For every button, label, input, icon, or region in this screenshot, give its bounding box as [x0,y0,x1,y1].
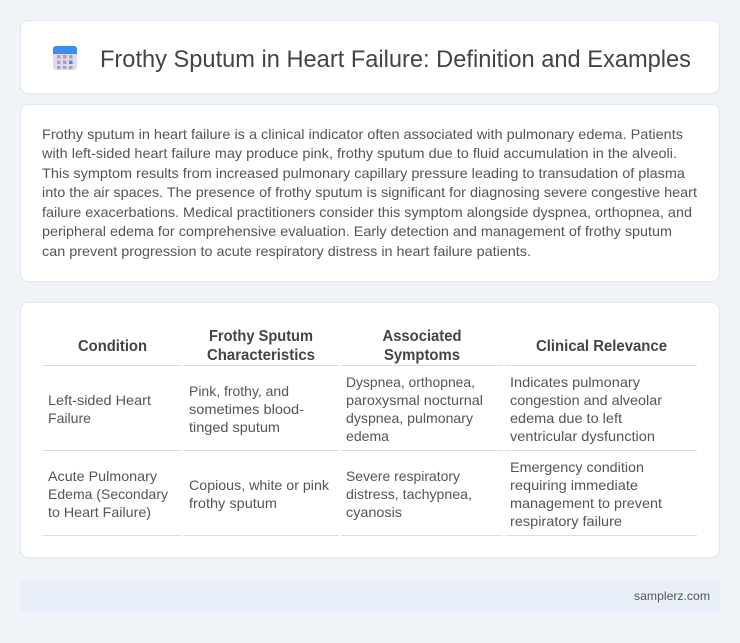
footer [20,579,720,613]
table row: left-sided heart failure: dyspnea, pulmonary [346,410,473,426]
table row: left-sided heart failure: Dyspnea, orthopnea, [346,374,475,390]
icon: calendar [53,46,77,70]
table row: left-sided heart failure: Left-sided Heart [48,392,151,408]
table row: left-sided heart failure: ventricular dysfunction [510,428,655,444]
table row: acute pulmonary edema: respiratory failure [510,513,622,529]
table row: left-sided heart failure: edema [346,428,389,444]
text block: description: can prevent progression to acute respiratory distress in heart failure patients. [42,243,531,259]
title: Frothy Sputum in Heart Failure: Definition and Examples [100,46,691,73]
table row: acute pulmonary edema: requiring immediate [510,477,638,493]
table row: acute pulmonary edema: Copious, white or pink [189,477,330,493]
table row: acute pulmonary edema: Severe respiratory [346,468,460,484]
footer source text: samplerz.com [634,589,710,603]
text block: description: This symptom results from increased pulmonary capillary pressure leading to transudation of plasma [42,165,685,181]
table row: acute pulmonary edema: to Heart Failure) [48,504,151,520]
text block: description: into the air spaces. The presence of frothy sputum is significant for diagnosing severe congestive heart [42,184,697,200]
table row: acute pulmonary edema: Edema (Secondary [48,486,168,502]
text block: description: with left-sided heart failure may produce pink, frothy sputum due to fluid accumulation in the alveoli. [41,145,677,161]
table header row: Characteristics [207,347,315,364]
table header row [78,328,667,364]
table row: acute pulmonary edema: Emergency condition [510,459,644,475]
table row: acute pulmonary edema: distress, tachypnea, [346,486,472,502]
table header row: Condition [78,338,147,355]
table row: left-sided heart failure: tinged sputum [189,419,280,435]
table row: left-sided heart failure: edema due to left [510,410,622,426]
table row: left-sided heart failure: Pink, frothy, and [189,383,289,399]
text block: description [41,126,697,259]
table row: acute pulmonary edema [48,459,662,529]
table row: acute pulmonary edema: Acute Pulmonary [48,468,157,484]
table header row: Frothy Sputum [209,328,313,345]
table row: left-sided heart failure: paroxysmal nocturnal [346,392,483,408]
table row: acute pulmonary edema: management to prevent [510,495,662,511]
text block: description: failure exacerbations. Medical practitioners consider this symptom alongside dyspnea, orthopnea, and [42,204,692,220]
table row: left-sided heart failure: congestion and alveolar [510,392,662,408]
table row: left-sided heart failure [48,374,662,444]
panel: description card [20,104,720,282]
table row: left-sided heart failure: Indicates pulmonary [510,374,640,390]
table row: acute pulmonary edema: frothy sputum [189,495,277,511]
table header row: Symptoms [384,347,460,364]
table header row: Clinical Relevance [536,338,667,355]
text block: description: Frothy sputum in heart failure is a clinical indicator often associated with pulmonary edema. Patients [42,126,683,142]
text block: description: peripheral edema for comprehensive evaluation. Early detection and management of frothy sputum [42,223,672,239]
panel: table card [20,302,720,558]
table row: left-sided heart failure: Failure [48,410,91,426]
table row: left-sided heart failure: sometimes blood- [189,401,304,417]
table row: acute pulmonary edema: cyanosis [346,504,402,520]
table header row: Associated [382,328,462,345]
panel: title card [20,20,720,94]
